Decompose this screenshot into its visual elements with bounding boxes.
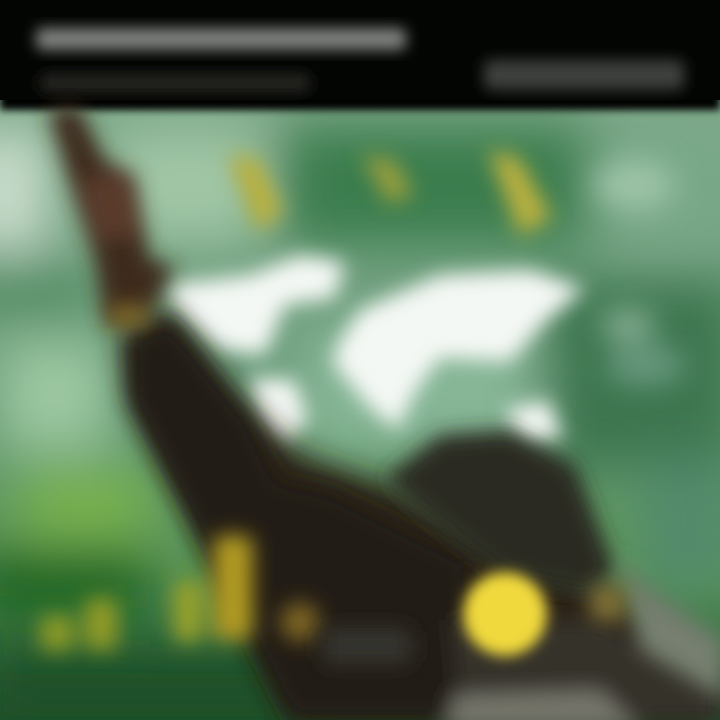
head [385, 430, 720, 700]
golden accents on the figure [40, 305, 626, 651]
header band [0, 0, 720, 110]
chart: yellow marks at top [228, 150, 552, 236]
heading: blurred title [36, 28, 406, 50]
faint icons on the right [595, 159, 685, 385]
world map silhouette [165, 255, 585, 450]
blurred subtitle [40, 74, 310, 92]
blurred header note [484, 60, 684, 90]
figure: dark arm and body [48, 105, 720, 720]
yellow circle badge [463, 572, 547, 656]
grey label blur on the figure [322, 628, 412, 664]
